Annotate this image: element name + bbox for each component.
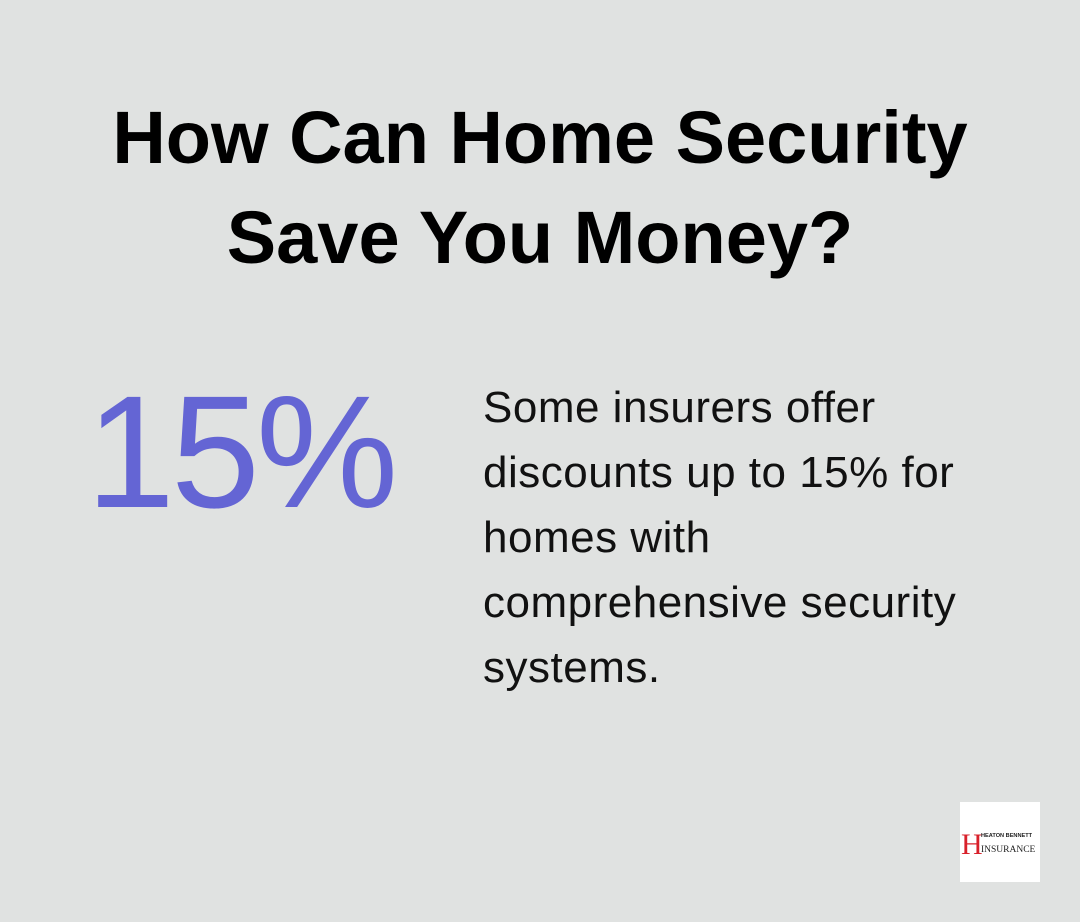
title: How Can Home Security — [112, 96, 968, 179]
description text: comprehensive security — [483, 578, 956, 627]
description text: systems. — [483, 643, 661, 692]
description text: Some insurers offer — [483, 383, 876, 432]
logo — [960, 802, 1040, 882]
logo: HEATON BENNETT — [981, 833, 1033, 839]
title: Save You Money? — [227, 196, 853, 279]
description text: homes with — [483, 513, 711, 562]
stat number: 15% — [86, 362, 394, 541]
title — [112, 96, 968, 279]
description text: discounts up to 15% for — [483, 448, 954, 497]
logo: H — [961, 828, 983, 861]
logo: INSURANCE — [981, 845, 1036, 855]
description text — [483, 383, 956, 692]
